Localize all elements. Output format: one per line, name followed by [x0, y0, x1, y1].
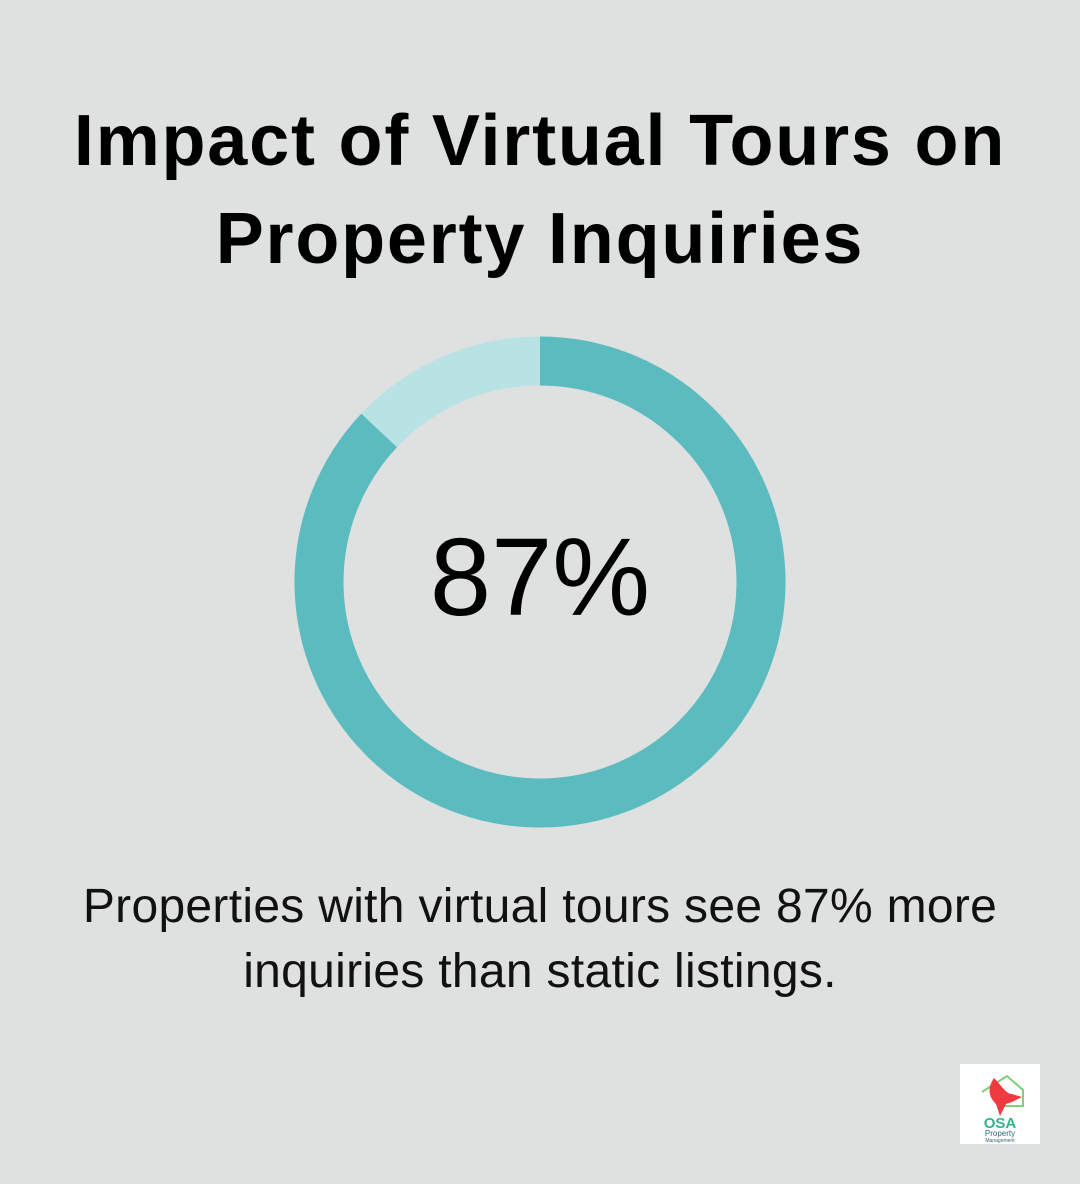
- icon: house: [982, 1076, 1023, 1106]
- logo: OSA: [984, 1115, 1016, 1132]
- description text: inquiries than static listings.: [243, 945, 837, 998]
- percentage value: 87%: [430, 516, 650, 639]
- icon: bird: [990, 1078, 1022, 1116]
- title: [74, 101, 1006, 279]
- logo: Property: [985, 1129, 1015, 1138]
- donut value segment: [319, 361, 761, 803]
- description text: [83, 880, 997, 998]
- description text: Properties with virtual tours see 87% more: [83, 880, 997, 933]
- logo: Management: [985, 1138, 1015, 1144]
- title: Property Inquiries: [216, 199, 864, 279]
- donut background segment: [319, 361, 761, 803]
- title: Impact of Virtual Tours on: [74, 101, 1006, 181]
- logo: [960, 1064, 1040, 1144]
